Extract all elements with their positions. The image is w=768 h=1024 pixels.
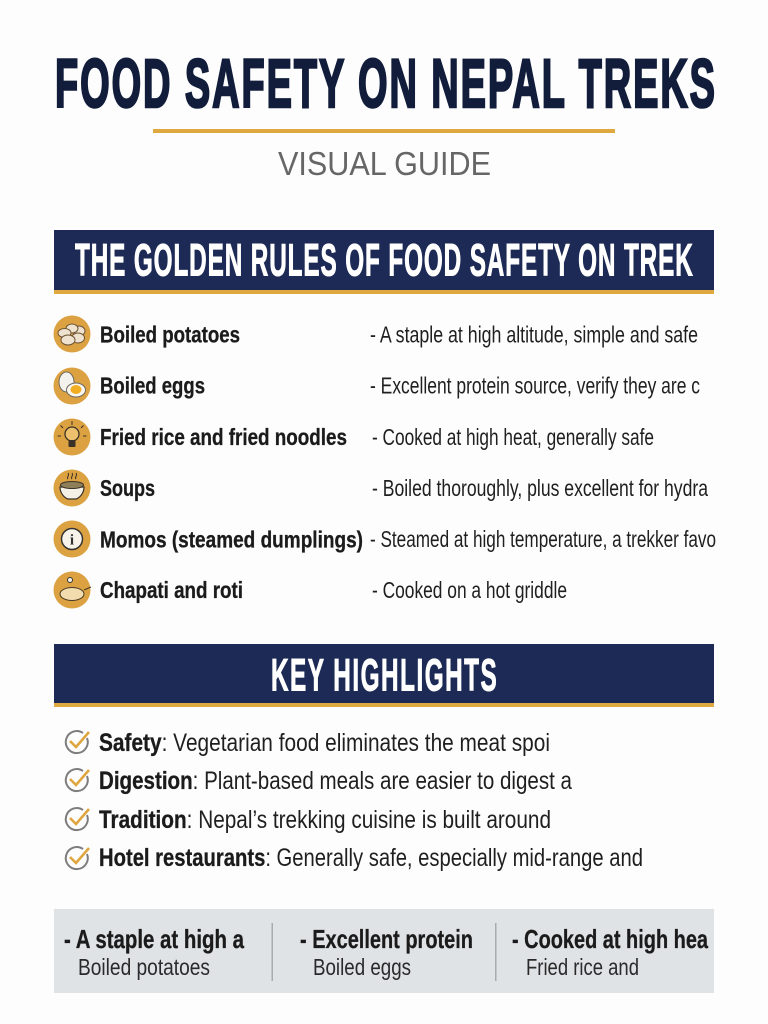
description: - Cooked on a hot griddle: [372, 577, 567, 603]
summary: eggs: - Excellent protein: [300, 924, 473, 954]
icon: egg: [54, 368, 90, 404]
panel: golden rules heading: THE GOLDEN RULES OF FOOD SAFETY ON TREK: [75, 234, 693, 285]
summary: potatoes: - A staple at high a: [64, 924, 244, 954]
summary: potatoes: Boiled potatoes: [78, 954, 210, 980]
summary: fried rice: Fried rice and: [526, 954, 639, 980]
row: soups: [54, 470, 708, 506]
panel: key highlights heading: [54, 644, 714, 707]
icon: info: i: [70, 532, 74, 548]
icon: potatoes: [54, 316, 90, 352]
icon: check: [66, 847, 89, 869]
label: Soups: [100, 475, 155, 501]
icon: check: [66, 731, 89, 753]
row: boiled eggs: [54, 368, 700, 404]
highlight: digestion: [66, 767, 572, 795]
row: chapati: [54, 572, 567, 608]
highlight: safety: [66, 729, 550, 757]
panel: key highlights heading: KEY HIGHLIGHTS: [271, 649, 497, 700]
summary: potatoes: [64, 924, 244, 980]
title underline: [153, 129, 615, 133]
text: Safety: Vegetarian food eliminates the meat spoi: [99, 729, 550, 757]
icon: light bulb: [54, 418, 90, 456]
text: Hotel restaurants: Generally safe, especially mid-range and: [99, 844, 643, 872]
panel: food list: [54, 316, 716, 608]
label: Boiled eggs: [100, 372, 205, 398]
icon: check: [66, 769, 89, 791]
icon: info: [54, 520, 90, 558]
text: Digestion: Plant-based meals are easier to digest a: [99, 767, 572, 795]
icon: chapati: [54, 572, 91, 608]
label: Momos (steamed dumplings): [100, 526, 363, 552]
icon: check: [66, 808, 89, 830]
panel: highlights list: [66, 729, 643, 872]
text: Tradition: Nepal’s trekking cuisine is built around: [99, 806, 551, 834]
highlight: tradition: [66, 806, 551, 834]
row: momos: [54, 520, 716, 558]
icon: soup bowl: [54, 470, 90, 506]
highlight: hotel restaurants: [66, 844, 643, 872]
summary: eggs: Boiled eggs: [313, 954, 411, 980]
label: Chapati and roti: [100, 577, 243, 603]
row: fried rice: [54, 418, 654, 456]
subtitle: VISUAL GUIDE: [278, 145, 491, 182]
panel: summary strip: [54, 909, 714, 993]
summary: fried rice: - Cooked at high hea: [512, 924, 708, 954]
label: Boiled potatoes: [100, 322, 240, 348]
label: Fried rice and fried noodles: [100, 424, 347, 450]
description: - Cooked at high heat, generally safe: [372, 424, 654, 450]
row: boiled potatoes: [54, 316, 698, 352]
title: FOOD SAFETY ON NEPAL TREKS: [55, 45, 715, 122]
summary: eggs: [300, 924, 473, 980]
summary: fried rice: [512, 924, 708, 980]
